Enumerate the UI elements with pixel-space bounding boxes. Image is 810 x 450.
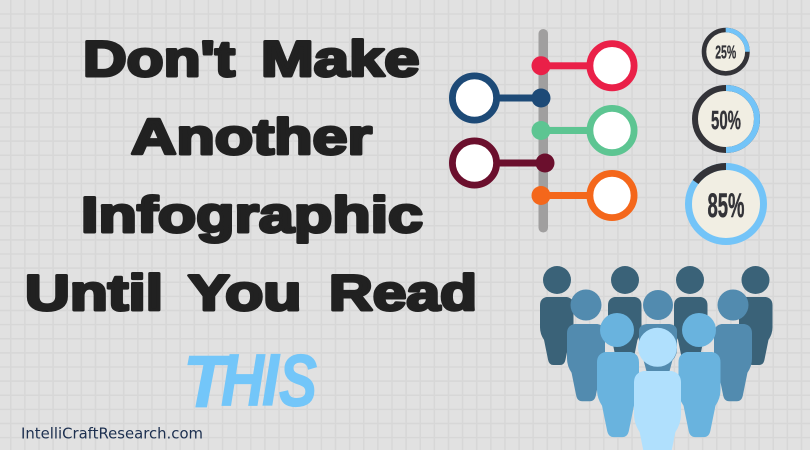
title: Until: [25, 265, 163, 321]
progress ring: 25%: [704, 30, 747, 73]
title: Make: [261, 31, 420, 87]
progress ring: 50%: 50%: [711, 105, 741, 135]
node: green: [532, 108, 634, 153]
node: orange: [532, 173, 634, 218]
title: Read: [329, 265, 477, 321]
timeline diagram: [452, 29, 634, 232]
people group icon: [540, 266, 772, 450]
back row figures: [540, 266, 772, 365]
front figure: [634, 328, 681, 450]
brush word: THIS: H: [221, 340, 265, 421]
brush word: THIS: S: [279, 341, 317, 422]
progress ring: 25%: 25%: [715, 42, 736, 62]
third row figures: [597, 313, 720, 437]
node: red: [532, 44, 634, 88]
title: Don't: [83, 31, 235, 87]
title: [25, 31, 477, 321]
progress ring: 85%: [688, 166, 764, 242]
title: Infographic: [81, 187, 423, 243]
timeline spine: [538, 29, 548, 232]
middle row figures: [567, 290, 752, 401]
title: Another: [131, 109, 372, 165]
title: You: [188, 265, 302, 321]
node: maroon: [452, 141, 554, 185]
website label: IntelliCraftResearch.com: [21, 425, 203, 442]
progress ring: 85%: 85%: [708, 187, 744, 225]
progress ring: 50%: [695, 88, 757, 150]
brush word: THIS: T: [183, 342, 232, 423]
brush word: THIS: I: [262, 340, 280, 421]
brush word: THIS: [183, 340, 317, 423]
node: blue: [452, 76, 550, 120]
